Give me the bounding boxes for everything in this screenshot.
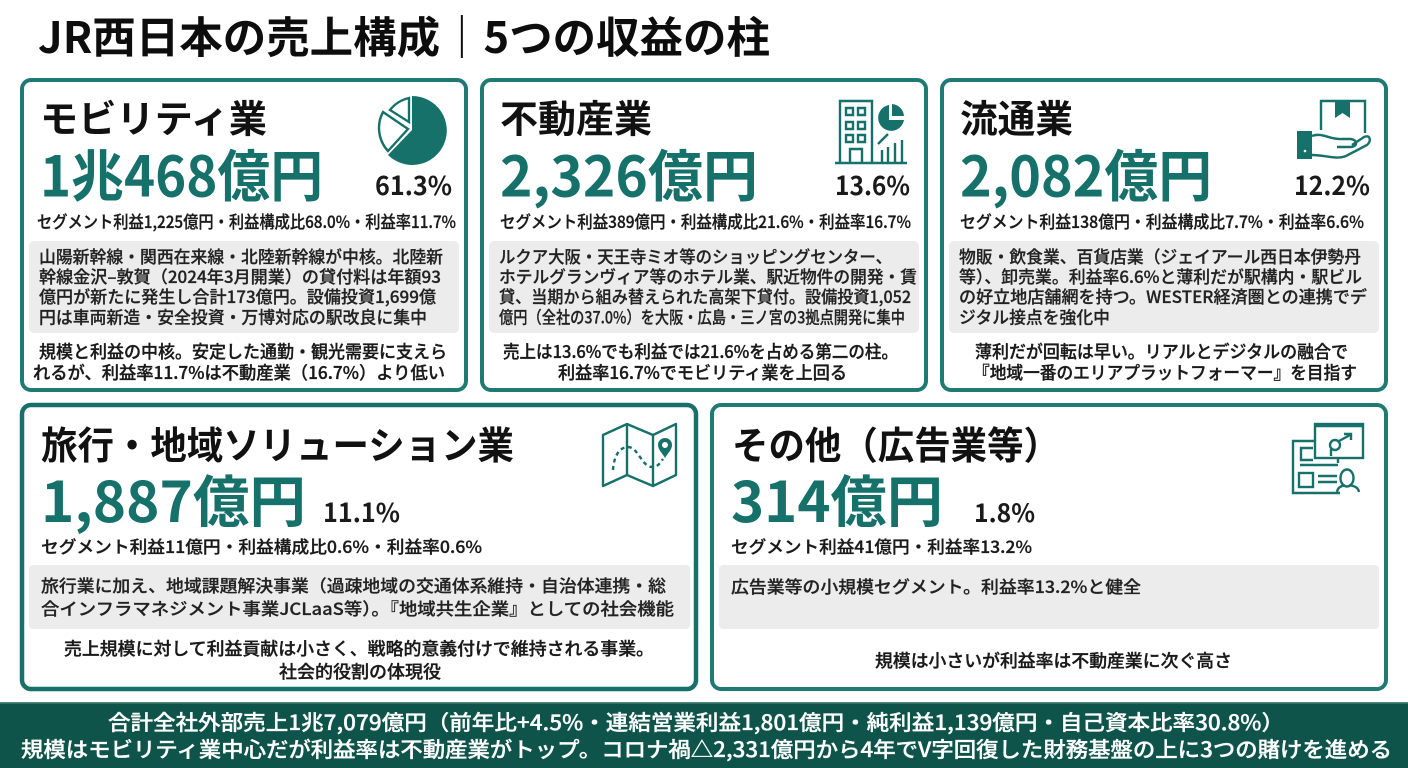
segment metrics: セグメント利益1,225億円・利益構成比68.0%・利益率11.7% bbox=[37, 208, 456, 233]
takeaway note: 規模は小さいが利益率は不動産業に次ぐ高さ bbox=[875, 648, 1232, 673]
sales figure: 2,326億円 bbox=[500, 132, 758, 214]
footer summary band bbox=[0, 702, 1408, 768]
share percentage: 61.3% bbox=[375, 166, 452, 203]
description box: の好立地店舗網を持つ。WESTER経済圏との連携でデ bbox=[959, 283, 1367, 308]
takeaway note: 規模と利益の中核。安定した通勤・観光需要に支えら bbox=[39, 339, 447, 364]
heading: その他（広告業等） bbox=[732, 415, 1060, 470]
heading: 流通業 bbox=[960, 88, 1073, 144]
share percentage: 11.1% bbox=[323, 493, 400, 530]
heading: モビリティ業 bbox=[40, 88, 267, 144]
sales figure: 1兆468億円 bbox=[40, 132, 323, 214]
description box: 幹線金沢–敦賀（2024年3月開業）の貸付料は年額93 bbox=[39, 263, 441, 288]
sales figure: 2,082億円 bbox=[960, 132, 1212, 214]
description box bbox=[719, 565, 1379, 629]
panel: travel and regional solutions bbox=[22, 405, 696, 689]
panel: real estate bbox=[482, 80, 926, 390]
share percentage: 12.2% bbox=[1294, 166, 1370, 203]
panel: mobility bbox=[22, 80, 466, 390]
takeaway note: 売上規模に対して利益貢献は小さく、戦略的意義付けで維持される事業。 bbox=[64, 636, 654, 661]
icon: folded map bbox=[603, 424, 676, 486]
panel border bbox=[712, 405, 1386, 689]
panel border bbox=[22, 405, 696, 689]
description box: 旅行業に加え、地域課題解決事業（過疎地域の交通体系維持・自治体連携・総 bbox=[41, 572, 666, 597]
icon: building and charts bbox=[835, 101, 907, 163]
takeaway note: 利益率16.7%でモビリティ業を上回る bbox=[558, 360, 847, 385]
description box bbox=[949, 241, 1379, 333]
description box: 円は車両新造・安全投資・万博対応の駅改良に集中 bbox=[39, 304, 427, 328]
icon: hand holding parcel bbox=[1297, 101, 1370, 159]
footer line: conclusion: 規模はモビリティ業中心だが利益率は不動産業がトップ。コロナ禍△2,331億円から4年でV字回復した財務基盤の上に3つの賭けを進める bbox=[21, 734, 1392, 764]
segment metrics: セグメント利益41億円・利益率13.2% bbox=[731, 533, 1032, 558]
description box: 貸、当期から組み替えられた高架下貸付。設備投資1,052 bbox=[499, 283, 911, 308]
panel border bbox=[942, 80, 1386, 390]
description box: ホテルグランヴィア等のホテル業、駅近物件の開発・賃 bbox=[499, 263, 917, 288]
description box: 億円（全社の37.0%）を大阪・広島・三ノ宮の3拠点開発に集中 bbox=[499, 304, 905, 328]
takeaway note: 売上は13.6%でも利益では21.6%を占める第二の柱。 bbox=[503, 339, 898, 364]
panel: other bbox=[712, 405, 1386, 689]
panel border bbox=[22, 80, 466, 390]
description box: ジタル接点を強化中 bbox=[959, 304, 1110, 328]
share percentage: 13.6% bbox=[835, 166, 910, 203]
description box: 等）、卸売業。利益率6.6%と薄利だが駅構内・駅ビル bbox=[959, 263, 1362, 288]
takeaway note bbox=[503, 339, 898, 385]
sales figure: 1,887億円 bbox=[41, 458, 306, 539]
sales figure: 314億円 bbox=[731, 458, 943, 539]
icon: web advertising bbox=[1293, 424, 1363, 493]
footer line: totals: 合計全社外部売上1兆7,079億円（前年比+4.5%・連結営業利益1,801億円・純利益1,139億円・自己資本比率30.8%） bbox=[108, 707, 1284, 737]
heading: 旅行・地域ソリューション業 bbox=[41, 415, 514, 470]
icon: pie chart bbox=[379, 96, 447, 165]
takeaway note: 『地域一番のエリアプラットフォーマー』を目指す bbox=[973, 360, 1357, 385]
description box: 広告業等の小規模セグメント。利益率13.2%と健全 bbox=[731, 573, 1141, 598]
description box bbox=[489, 241, 919, 333]
share percentage: 1.8% bbox=[974, 494, 1035, 530]
takeaway note: 薄利だが回転は早い。リアルとデジタルの融合で bbox=[975, 339, 1348, 364]
description box bbox=[29, 565, 690, 629]
heading: 不動産業 bbox=[500, 88, 652, 144]
takeaway note: れるが、利益率11.7%は不動産業（16.7%）より低い bbox=[33, 360, 445, 385]
title: JR西日本の売上構成｜5つの収益の柱 bbox=[38, 4, 770, 66]
panel: distribution bbox=[942, 80, 1386, 390]
description box: 億円が新たに発生し合計173億円。設備投資1,699億 bbox=[39, 283, 436, 308]
description box: 物販・飲食業、百貨店業（ジェイアール西日本伊勢丹 bbox=[959, 243, 1361, 268]
description box: 山陽新幹線・関西在来線・北陸新幹線が中核。北陸新 bbox=[39, 243, 443, 268]
takeaway note bbox=[64, 636, 654, 684]
description box: ルクア大阪・天王寺ミオ等のショッピングセンター、 bbox=[499, 243, 892, 268]
segment metrics: セグメント利益138億円・利益構成比7.7%・利益率6.6% bbox=[960, 208, 1364, 233]
segment metrics: セグメント利益389億円・利益構成比21.6%・利益率16.7% bbox=[500, 208, 911, 233]
takeaway note bbox=[973, 339, 1357, 385]
panel border bbox=[482, 80, 926, 390]
takeaway note: 社会的役割の体現役 bbox=[279, 659, 442, 684]
description box bbox=[29, 241, 459, 333]
description box: 合インフラマネジメント事業JCLaaS等）。『地域共生企業』としての社会機能 bbox=[41, 595, 674, 620]
takeaway note bbox=[33, 339, 447, 385]
segment metrics: セグメント利益11億円・利益構成比0.6%・利益率0.6% bbox=[41, 533, 482, 558]
